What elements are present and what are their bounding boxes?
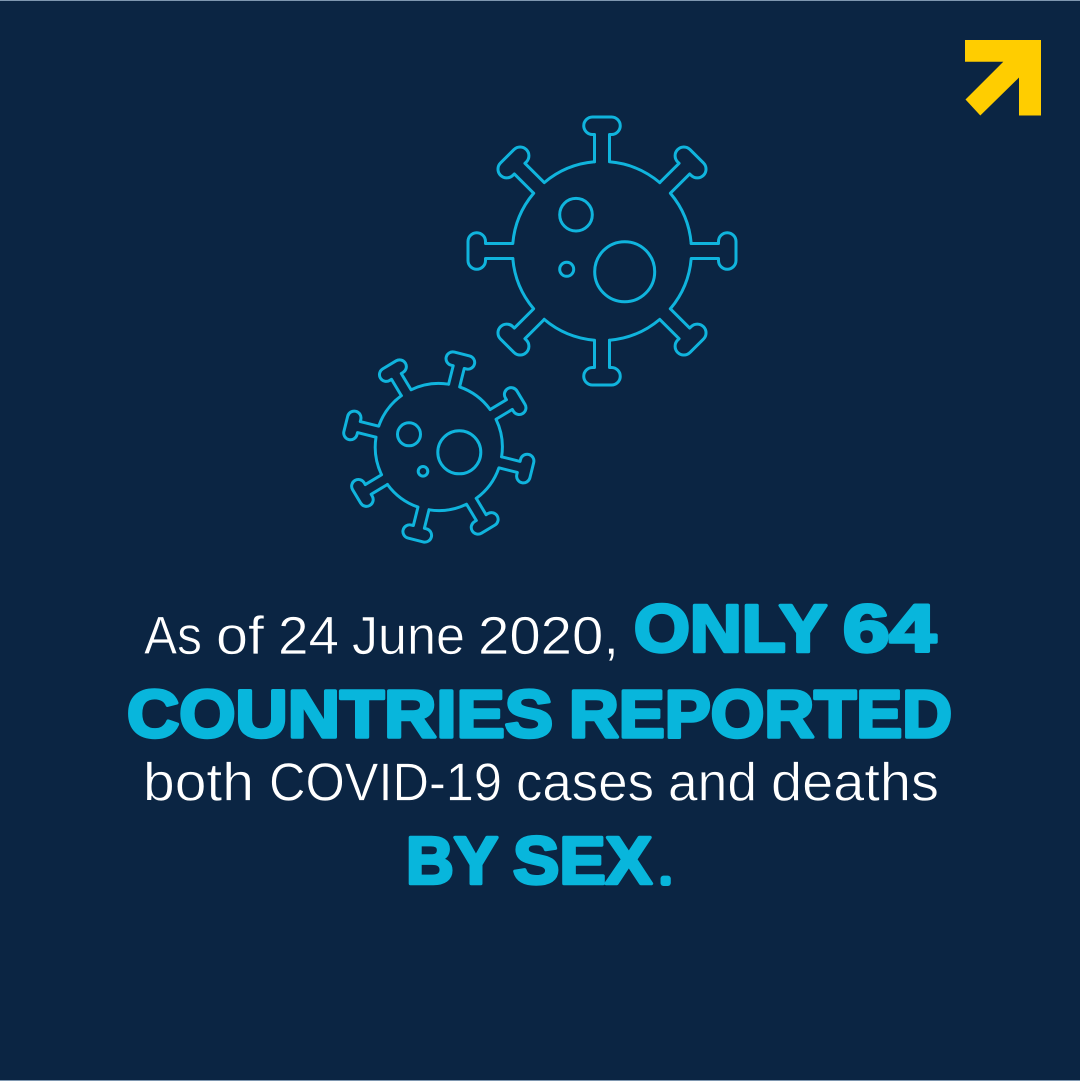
text: ONLY 64: ONLY [634, 592, 827, 666]
text block: headline statement [127, 592, 952, 899]
text: BY SEX.: . [662, 857, 670, 890]
text: both COVID-19 cases and deaths: COVID-19 [269, 752, 502, 812]
text: As of 24 June 2020,: As [144, 606, 202, 666]
text: both COVID-19 cases and deaths [143, 752, 939, 812]
icon: yellow arrow logo [965, 40, 1041, 116]
text: BY SEX.: BY [406, 824, 498, 899]
text: As of 24 June 2020,: of [216, 606, 265, 666]
text: BY SEX. [406, 824, 670, 899]
text: COUNTRIES REPORTED [127, 677, 952, 752]
text: BY SEX.: SEX [513, 824, 652, 899]
text: As of 24 June 2020,: 2020, [478, 606, 619, 666]
text: COUNTRIES REPORTED: COUNTRIES [127, 677, 553, 752]
text: both COVID-19 cases and deaths: and [668, 752, 757, 812]
text: As of 24 June 2020,: 24 [278, 606, 339, 666]
text: both COVID-19 cases and deaths: both [143, 752, 254, 812]
icon: large virus [466, 115, 738, 387]
text: both COVID-19 cases and deaths: deaths [771, 752, 939, 812]
icon: small virus [336, 344, 542, 550]
text: As of 24 June 2020,: June [352, 606, 465, 666]
text: ONLY 64 [634, 592, 936, 666]
text: COUNTRIES REPORTED: REPORTED [569, 677, 952, 752]
text: both COVID-19 cases and deaths: cases [516, 752, 654, 812]
text: As of 24 June 2020, [144, 606, 619, 666]
text: ONLY 64: 64 [843, 592, 936, 666]
